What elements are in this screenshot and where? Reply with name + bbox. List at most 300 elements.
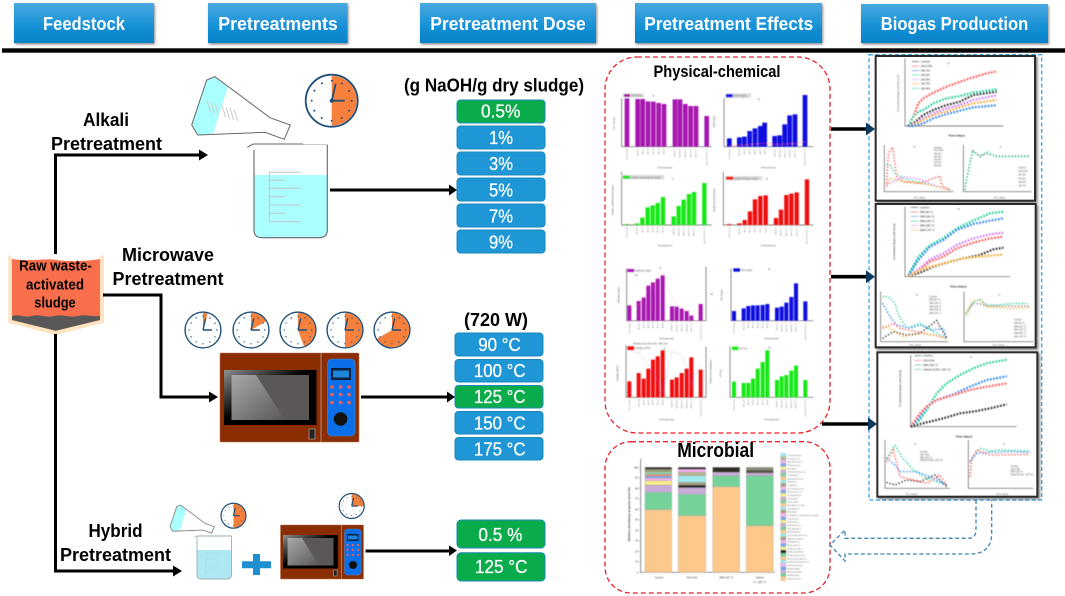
legend: genera: Methanothrix [787,574,801,577]
legend: genera: Methanobrevibacter [787,557,807,560]
line chart: microwave accumulated biogas: MW-100 °C [1014,326,1026,328]
bar chart: VFA: b) [768,269,771,271]
bar chart: turbidity and absorbance [616,342,713,421]
bar chart: COD: AN-3% [748,148,751,154]
bar chart: COD [714,93,813,169]
bar chart: COD: COD (mg/L) [714,115,716,128]
line chart: hybrid accumulated biogas: b) [914,444,916,446]
line chart: microwave accumulated biogas: MW-90 °C [1014,323,1025,325]
bar chart: soluble protein: AN-5% [754,226,757,232]
line chart: hybrid accumulated biogas: Time (days) [906,494,918,496]
arrow: microwave to temperatures [361,392,455,402]
list: microwave temperatures [455,333,543,460]
label: Alkali Pretreatment: Alkali [83,110,129,130]
chart panel: microwave biogas [876,204,1036,347]
line chart: alkali accumulated biogas: a) [947,63,950,65]
bar chart: CST: AN-0.5% [742,399,745,406]
bar chart: alkalinity and pH: pH [710,294,713,296]
line chart: hybrid accumulated biogas: Accumulated biogas yield (mL/g) [899,370,902,407]
line chart: alkali accumulated biogas: Time (days) [948,134,965,138]
legend: genera: Methanolinea [787,544,801,547]
bar chart: VS/TS: MW-150 °C [690,148,692,158]
bar chart: soluble carbohydrate: MW-175 °C [694,226,696,236]
bar chart: VFA: MW-90 °C [777,322,779,331]
line chart: microwave accumulated biogas: MW-175 °C [929,313,942,315]
legend: genera: Syntrophus [787,521,798,524]
stacked bar chart: genus abundance: 40 [635,529,639,532]
stacked bar chart: genus abundance: 30 [635,540,639,543]
legend: genera: Dechloromonas sp. [787,471,806,474]
bar chart: turbidity and absorbance: AN-7% [656,399,659,405]
line chart: alkali accumulated biogas: b) [913,147,916,149]
legend: genera: Desulfobulbus [787,528,801,530]
line chart: hybrid accumulated biogas: Hybrid (0.5%, 125 °C) [923,367,951,371]
bar chart: soluble carbohydrate: AN-7% [656,226,659,232]
stacked bar chart: genus abundance: 70 [635,498,639,501]
legend: genera: Unclassified Bacteria [787,534,808,537]
line chart: alkali accumulated biogas: Accumulated biogas yield (mL/g VS) [897,74,900,112]
bar chart: CST: Pretreatments [764,418,780,421]
bar chart: VFA: AN-1% [747,322,750,328]
bar chart: CST: CST (s) [739,348,747,350]
bar chart: turbidity and absorbance: Turbidity (NTU) [616,365,619,381]
panel: physical-chemical effects [605,57,830,433]
legend: genera: Trichococcus [787,457,800,460]
bar chart: VS/TS: AN-5% [652,148,655,154]
line chart: microwave accumulated biogas: Control [1014,319,1022,322]
legend: genera: Methanomassiliicoccus [787,561,810,564]
bar chart: soluble carbohydrate: MW-150 °C [689,226,691,236]
bar chart: COD: AN-1% [743,148,746,154]
line chart: hybrid accumulated biogas: AN-0.5% [920,454,929,457]
list: alkali doses: 0.5% [481,102,520,122]
line chart: alkali accumulated biogas: AN-0.5% [1018,170,1028,173]
bar chart: soluble protein: MW-90 °C [776,226,778,235]
arrow: hybrid to doses [366,546,457,556]
line chart: alkali accumulated biogas: AN-3% [921,73,930,77]
bar chart: alkalinity and pH: AN-9% [661,322,664,328]
line chart: microwave accumulated biogas: Time (days) [909,345,921,347]
stacked bar chart: genus abundance: Relative abundancy at genus level (%) [627,487,631,541]
bar chart: VFA: MW-175 °C [796,322,798,332]
bar chart: soluble carbohydrate: Control sludge [626,227,629,238]
line chart: hybrid accumulated biogas: MW-125 °C [920,457,932,459]
bar chart: VS/TS: Pretreatments [658,166,673,169]
legend: genera: Acinetobacter [787,531,801,534]
line chart: alkali accumulated biogas: AN-1% [1018,174,1026,177]
line chart: alkali accumulated biogas: AN-5% [1018,181,1026,184]
stacked bar chart: genus abundance: 60 [635,508,639,511]
bar chart: VS/TS: AN-9% [663,148,666,154]
bar chart: soluble carbohydrate: Soluble carbohydrates (mg/L) [611,185,614,215]
label: Alkali Pretreatment [51,110,162,154]
bar chart: soluble protein: MW-100 °C [781,226,783,236]
line chart: alkali accumulated biogas: Control [921,60,930,64]
bar chart: CST: d) [768,347,771,349]
chart group: physical-chemical upper four bar charts [611,93,813,248]
bar chart: VS/TS: MW-90 °C [675,148,677,157]
bar chart: alkalinity and pH: MW-90 °C [672,322,674,331]
bar chart: CST: Control sludge [733,399,736,411]
bar chart: alkalinity and pH: Hybrid (0.5%,125 °C) [700,322,702,340]
bar chart: soluble protein: AN-1% [743,226,746,232]
bar chart: soluble protein [713,172,813,248]
bar chart: VS/TS: VS / TS (%) [614,117,616,129]
line chart: microwave accumulated biogas: MW-100 °C [929,303,942,305]
bar chart: soluble carbohydrate: MW-90 °C [673,226,675,235]
icon: raw waste-activated sludge tank [8,255,104,335]
list: microwave temperatures: 175 °C [474,439,526,459]
line chart: microwave accumulated biogas: Time (days) [992,345,1005,347]
chart group: physical-chemical lower four bar charts [616,267,813,421]
legend: genera: Syntrophomonas [787,477,804,480]
header: Pretreatment Dose: Pretreatment Dose [430,14,586,34]
line chart: hybrid accumulated biogas [885,354,1034,496]
legend: genera: Methanosarcina [787,564,803,567]
bar chart: VFA: MW-100 °C [781,322,783,332]
line chart: microwave accumulated biogas: Control [929,295,937,298]
bar chart: COD: MW-100 °C [779,148,781,158]
bar chart: alkalinity and pH: MW-175 °C [691,322,693,332]
panel: microbial community [605,440,830,593]
list: alkali doses: 3% [489,154,513,174]
line chart: microwave accumulated biogas: MW-100 °C [920,214,935,218]
line chart: alkali accumulated biogas: Time (days) [913,197,926,199]
header: Pretreatments: Pretreatments [218,14,338,34]
bar chart: soluble carbohydrate: AN-3% [646,226,649,232]
bar chart: soluble carbohydrate: AN-0.5% [636,226,639,234]
bar chart: alkalinity and pH: MW-100 °C [676,322,678,332]
bar chart: turbidity and absorbance: AN-3% [647,399,650,405]
legend: genera: Methanofollis [787,567,800,570]
label: Hybrid Pretreatment: Pretreatment [60,545,171,565]
bar chart: VFA: MW-150 °C [791,322,793,332]
bar chart: VFA: Hybrid (0.5%,125 °C) [805,322,807,340]
bar chart: VS/TS: MW-175 °C [696,148,698,158]
list: hybrid doses: 0.5 % [478,525,522,545]
line chart: alkali accumulated biogas [884,58,1032,199]
bar chart: CST: AN-5% [756,399,759,405]
stacked bar chart: genus abundance: 10 [635,561,639,564]
bar chart: alkalinity and pH [617,267,713,340]
icon: beaker with solution [247,144,328,238]
bar chart: VS/TS: AN-0.5% [636,148,639,156]
icon: mini clock microwave [339,494,364,518]
bar chart: alkalinity and pH: AN-3% [647,322,650,328]
legend: genera: Methanosaeta [787,577,802,580]
header: Biogas Production: Biogas Production [881,14,1028,34]
label: Hybrid Pretreatment: Hybrid [88,521,142,541]
line chart: hybrid accumulated biogas: Control [923,354,933,358]
legend: genera: Methanoculleus [787,547,802,550]
bar chart: turbidity and absorbance: MW-175 °C [691,398,693,408]
bar chart: soluble protein: MW-125 °C [786,226,788,236]
legend: genera: Bacteroides [787,501,799,504]
icon: pouring flask [192,77,290,139]
legend: genera: Candidatus Cloacimonas sludge [787,514,819,517]
header: Pretreatment Effects [635,3,822,43]
line chart: hybrid accumulated biogas: Hybrid (0.5%, 125 °C) [920,459,943,462]
line chart: hybrid accumulated biogas: MW-125 °C [923,363,938,367]
bar chart: VS/TS: AN-7% [657,148,660,154]
legend: genera: Nitrosomonas [787,464,801,467]
bar chart: VFA: Control sludge [733,322,736,334]
bar chart: soluble protein: Soluble proteins (mg/L) [713,188,716,212]
legend: genera: Smithella [787,481,797,484]
stacked bar chart: genus abundance: 100 [634,466,639,469]
line chart: alkali accumulated biogas: AN-0.5% [934,149,943,152]
bar chart: CST: AN-7% [761,399,764,405]
bar chart: CST: MW-150 °C [791,398,793,408]
bar chart: VFA: AN-7% [761,322,764,328]
bar chart: turbidity and absorbance: MW-150 °C [686,398,688,408]
legend: genera: Methanoregula [787,571,803,574]
bar chart: VS/TS: VS/TS (%) [631,96,642,98]
bar chart: CST: AN-9% [766,399,769,405]
bar chart: VFA: AN-9% [766,322,769,328]
legend: genera: Macellibacteroides [787,504,805,507]
bar chart: turbidity and absorbance: c) [663,348,665,350]
bar chart: turbidity and absorbance: Control sludge [628,399,631,411]
line chart: microwave accumulated biogas: MW-125 °C [1014,330,1026,332]
bar chart: alkalinity and pH: Alkalinity (mg/L) [635,269,651,272]
arrow: sludge to alkali [56,150,208,254]
arrow: beaker to alkali dose [330,184,457,196]
line chart: hybrid accumulated biogas: a) [970,357,972,359]
bar chart: VS/TS: Control sludge [626,148,629,160]
bar chart: alkalinity and pH: Control sludge [628,322,631,334]
heading: Microbial: Microbial [677,440,754,462]
legend: genera: Thermomonas [787,454,801,457]
legend: genera: Petrimonas [787,497,798,500]
line chart: alkali accumulated biogas: Control [934,146,942,149]
icon: mini flask [170,505,214,533]
bar chart: turbidity and absorbance: Pretreatments [659,418,675,421]
line chart: microwave accumulated biogas: Control [920,205,929,209]
line chart: microwave accumulated biogas: Accumulated biogas yield (mL/g) [893,223,896,260]
line chart: alkali accumulated biogas: AN-9% [934,165,941,168]
chart panel: alkali biogas [876,56,1035,201]
bar chart: soluble protein: Pretreatments [761,245,776,248]
line chart: microwave accumulated biogas: MW-90 °C [929,300,940,302]
line chart: alkali accumulated biogas: AN-3% [934,156,941,159]
list: alkali doses: 1% [489,128,513,148]
bar chart: CST: AN-1% [747,399,750,405]
line chart: microwave accumulated biogas: MW-90 °C [920,210,933,214]
bar chart: COD: MW-150 °C [789,148,791,158]
bar chart: COD: MW-175 °C [795,148,797,158]
bar chart: soluble carbohydrate: AN-5% [651,226,654,232]
legend: genera: Clostridium [787,474,798,477]
arrow: physical-chemical to alkali biogas [831,122,875,136]
bar chart: VFA: MW-125 °C [786,322,788,332]
line chart: microwave accumulated biogas: c) [998,295,1000,297]
bar chart: VS/TS [614,93,712,169]
legend: genera: Mycobacterium [787,461,802,464]
header: Pretreatments [208,3,348,43]
stacked bar chart: genus abundance: 90 [635,477,639,480]
bar chart: VFA: VFA (mg/L) [721,289,724,301]
arrow: physical-chemical to hybrid biogas [822,418,877,430]
label: Microwave Pretreatment: Microwave [122,245,214,265]
line chart: alkali accumulated biogas: AN-7% [934,162,941,165]
header: Feedstock: Feedstock [43,14,126,34]
chart panel: hybrid biogas [877,352,1037,497]
bar chart: alkalinity and pH: a) [659,267,662,269]
bar chart: turbidity and absorbance: Hybrid (0.5%,125 °C) [700,399,702,416]
list: alkali doses: 7% [489,206,513,226]
bar chart: alkalinity and pH: AN-1% [642,322,645,328]
stacked bar chart: genus abundance: 50 [635,519,639,522]
icons: microwave time clocks [185,312,410,348]
bar chart: CST: CST (s) [721,369,723,377]
bar chart: turbidity and absorbance: AN-9% [661,399,664,405]
header: Feedstock [14,3,154,43]
list: microwave temperatures: 100 °C [474,361,526,381]
bar chart: VFA: VFA (mg/L) [741,269,753,272]
bar chart: CST: MW-90 °C [777,398,779,407]
line chart: hybrid accumulated biogas: Control [1011,465,1019,468]
bar chart: soluble carbohydrate: Hybrid (0.5%,125 °C) [704,226,706,244]
bar chart: soluble protein: Control sludge [728,227,731,238]
bar chart: alkalinity and pH: AN-0.5% [637,322,640,330]
header divider [2,48,1065,53]
line chart: hybrid accumulated biogas: AN-0.5% [1011,468,1020,471]
line chart: alkali accumulated biogas: AN-7% [921,82,930,86]
line chart: alkali accumulated biogas: AN-3% [1018,177,1026,180]
bar chart: VS/TS: AN-1% [641,148,644,154]
line chart: microwave accumulated biogas: Time (days) [950,284,967,288]
bar chart: VS/TS: Hybrid (0.5%,125 °C) [706,148,708,166]
stacked bar chart: genus abundance: Control [655,575,664,579]
bar chart: soluble protein: d) [766,178,768,180]
bar chart: soluble carbohydrate: c) [672,178,674,180]
bar chart: alkalinity and pH: Pretreatments [659,337,675,340]
header: Pretreatment Effects: Pretreatment Effects [644,14,813,34]
list: alkali doses [457,100,545,253]
line chart: alkali accumulated biogas: c) [999,146,1001,148]
bar chart: COD: MW-90 °C [774,148,776,157]
line chart: microwave accumulated biogas: a) [957,208,960,210]
icon: raw waste-activated sludge tank: sludge [34,294,76,311]
list: hybrid doses: 125 °C [475,557,527,577]
bar chart: VFA [721,268,813,340]
bar chart: alkalinity and pH: Alkalinity (mg/L) [617,286,620,303]
label: Microwave Pretreatment [112,245,224,289]
legend: genera: Treponema [787,517,799,520]
bar chart: turbidity and absorbance: MW-90 °C [672,398,674,407]
legend: genera: Paludibacter [787,507,800,510]
stacked bar chart: genus abundance: b + 125 °C [753,580,766,584]
bar chart: turbidity and absorbance: AN-0.5% [637,399,640,406]
line chart: alkali accumulated biogas: AN-5% [921,77,930,81]
line chart: microwave accumulated biogas: MW-150 °C [920,223,935,227]
bar chart: VFA: AN-0.5% [742,322,745,330]
line chart: microwave accumulated biogas: MW-150 °C [929,310,942,312]
line chart: hybrid accumulated biogas: MW-125 °C [1011,472,1023,474]
bar chart: alkalinity and pH: AN-7% [656,322,659,328]
line chart: hybrid accumulated biogas: Time (days) [956,435,972,439]
bar chart: soluble protein: MW-150 °C [791,226,793,236]
bar chart: alkalinity and pH: pH [635,275,638,277]
bar chart: turbidity and absorbance: MW-100 °C [676,398,678,408]
line chart: microwave accumulated biogas: MW-175 °C [920,228,935,232]
bar chart: turbidity and absorbance: AN-5% [652,399,655,405]
icon: microwave oven [220,353,359,442]
stacked bar chart: genus abundance: 20 [635,550,639,553]
icon: raw waste-activated sludge tank: Raw waste- [19,258,92,275]
legend: genera: Proteiniphilum [787,494,801,497]
legend: genera: Methanobacterium [787,554,805,557]
line chart: alkali accumulated biogas: AN-0.5% [921,64,933,68]
bar chart: COD: AN-0.5% [738,148,741,156]
arrow: dashed return from biogas to microbial [830,500,992,561]
line chart: microwave accumulated biogas: MW-125 °C [920,219,935,223]
label: Microwave Pretreatment: Pretreatment [112,269,224,289]
bar chart: COD: Control sludge [728,148,731,160]
bar chart: soluble protein: AN-7% [759,226,762,232]
list: hybrid doses [457,520,545,581]
bar chart: soluble protein: AN-9% [764,226,767,232]
bar chart: COD: Hybrid (0.5%,125 °C) [805,148,807,166]
bar chart: COD: AN-9% [763,148,766,154]
line chart: alkali accumulated biogas: AN-5% [934,159,941,162]
line chart: hybrid accumulated biogas: Time (days) [996,494,1009,496]
bar chart: alkalinity and pH: MW-150 °C [686,322,688,332]
bar chart: soluble carbohydrate: AN-9% [662,226,665,232]
bar chart: soluble carbohydrate: Pretreatments [658,245,673,248]
list: microwave temperatures: 150 °C [474,413,526,433]
line chart: hybrid accumulated biogas: Control [920,450,928,453]
list: microwave temperatures: 90 °C [478,335,521,355]
bar chart: soluble carbohydrate: Soluble Carbohydrate (mg/L) [631,176,661,179]
bar chart: VS/TS: MW-100 °C [680,148,682,158]
bar chart: CST: AN-3% [752,399,755,405]
line chart: hybrid accumulated biogas: Hybrid (0.5%, 125 °C) [1011,473,1034,476]
label: Alkali Pretreatment: Pretreatment [51,134,162,154]
stacked bar chart: genus abundance: AN-0.5% [687,575,698,579]
line chart: alkali accumulated biogas: AN-9% [921,86,930,90]
bar chart: VFA: Pretreatments [764,337,780,340]
list: microwave temperatures: 125 °C [474,387,526,407]
bar chart: COD: AN-5% [754,148,757,154]
stacked bar chart: genus abundance: MW-125 °C [719,575,733,579]
line chart: alkali accumulated biogas: AN-7% [1018,185,1026,188]
bar chart: CST: MW-100 °C [781,398,783,408]
line chart: microwave accumulated biogas: MW-150 °C [1014,333,1026,335]
bar chart: CST [721,347,813,421]
bar chart: soluble protein: MW-175 °C [796,226,798,236]
heading: Physical-chemical: Physical-chemical [654,62,780,81]
legend: genera: Longilinea [787,485,798,487]
stacked bar chart: genus abundance [627,453,819,584]
line chart: microwave accumulated biogas: MW-125 °C [929,306,942,308]
label: Hybrid Pretreatment [60,521,171,565]
list: alkali doses: 5% [489,181,513,201]
bar chart: soluble protein: AN-3% [749,226,752,232]
header: Biogas Production [861,4,1048,43]
bar chart: VS/TS: MW-125 °C [685,148,687,158]
icon: mini microwave [280,525,364,579]
label: alkali dose unit: (g NaOH/g dry sludge) [404,76,584,96]
bar chart: VS/TS: a) [652,96,655,98]
bar chart: soluble carbohydrate [611,172,712,248]
bar chart: turbidity and absorbance: Particle size distribution [710,359,713,384]
line chart: microwave accumulated biogas [881,205,1033,347]
line chart: alkali accumulated biogas: Time (days) [993,197,1006,199]
label: microwave power: (720 W) [464,310,528,330]
legend: genera: Hyphomicrobium [787,537,804,540]
